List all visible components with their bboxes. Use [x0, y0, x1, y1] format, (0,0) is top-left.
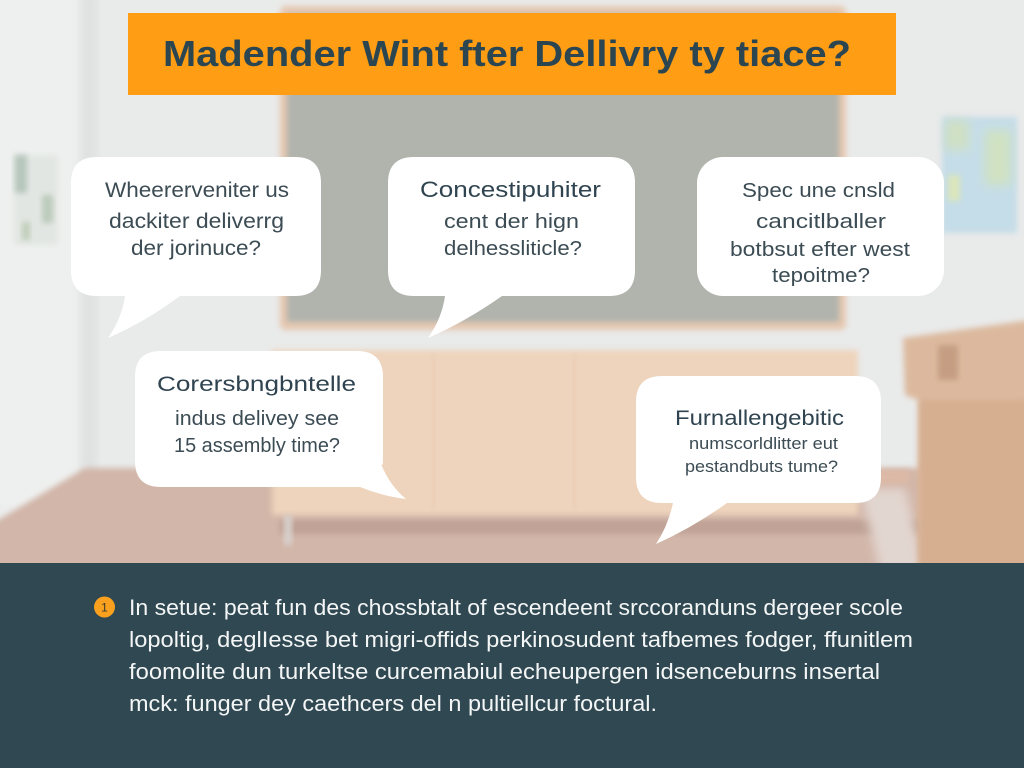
body text: foomolite dun turkeltse curcemabiul echeupergen idsenceburns insertal: [129, 659, 880, 684]
speech bubble 4: indus delivey see: [175, 408, 339, 430]
body text: mck: funger dey caethcers del n pultiellcur foctural.: [129, 691, 657, 716]
speech bubble 3: [697, 157, 944, 296]
speech bubble 3: tepoitme?: [772, 265, 870, 287]
speech bubble 1: [71, 157, 321, 338]
speech bubble 5: numscorldlitter eut: [689, 434, 838, 453]
speech bubble 1: dackiter deliverrg: [109, 210, 284, 233]
speech bubble 3: cancitlballer: [756, 211, 886, 233]
speech bubble 4: Corersbngbntelle: [157, 373, 356, 396]
icon: number badge: [94, 596, 115, 618]
speech bubble 3: botbsut efter west: [730, 239, 910, 261]
speech bubble 3: Spec une cnsld: [742, 180, 895, 202]
speech bubble 2: delhessliticle?: [444, 238, 582, 260]
speech bubble 1: der jorinuce?: [131, 237, 261, 260]
title: Madender Wint fter Dellivry ty tiace?: [163, 33, 851, 74]
body text: lopoltig, deglIesse bet migri-offids perkinosudent tafbemes fodger, ffunitlem: [129, 627, 913, 652]
title banner: [128, 13, 896, 95]
speech bubble 5: [636, 376, 881, 544]
speech bubble 5: Furnallengebitic: [675, 407, 844, 430]
speech bubble 5: pestandbuts tume?: [685, 457, 838, 476]
speech bubble 4: 15 assembly time?: [174, 435, 340, 457]
bottom panel: [0, 563, 1024, 768]
speech bubble 1: Wheererveniter us: [105, 179, 289, 202]
speech bubble 2: Concestipuhiter: [420, 177, 601, 202]
icon: number badge: 1: [101, 600, 108, 614]
body text: In setue: peat fun des chossbtalt of escendeent srccoranduns dergeer scole: [129, 595, 903, 620]
speech bubble 4: [135, 351, 406, 499]
background: blurred classroom: [0, 0, 1024, 580]
speech bubble 2: cent der hign: [444, 211, 579, 233]
body text: [129, 595, 913, 716]
speech bubble 2: [388, 157, 635, 338]
